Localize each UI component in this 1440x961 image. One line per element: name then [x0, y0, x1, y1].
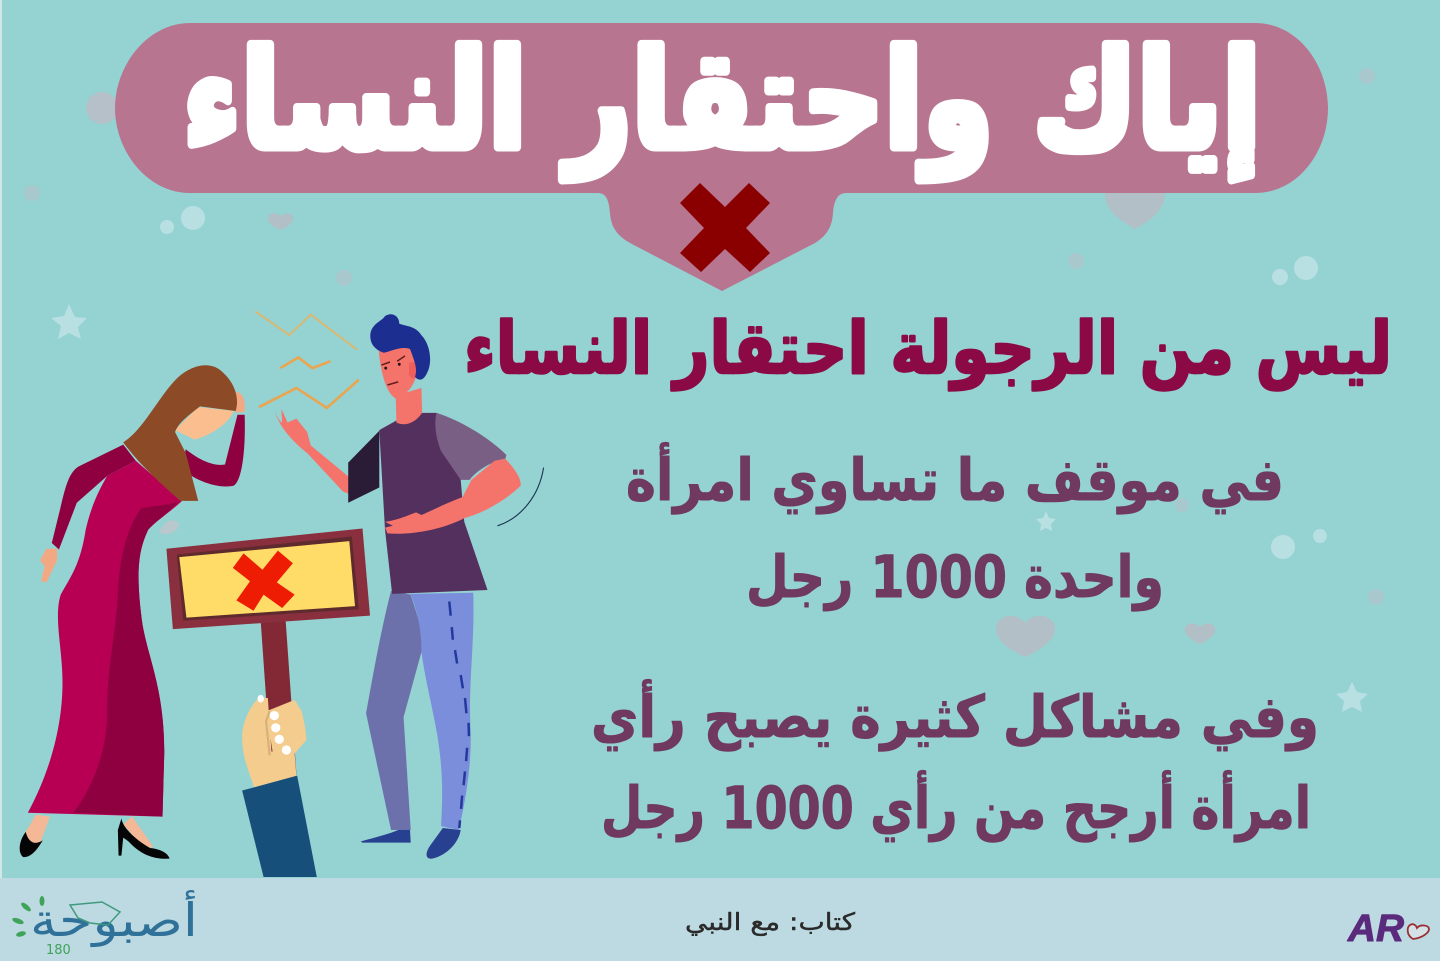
logo: left: 180: [46, 943, 71, 958]
banner: [115, 22, 1328, 291]
logo: left: [12, 890, 198, 958]
icon: anger zigzags: [255, 311, 359, 408]
icon: red x mark: [680, 183, 770, 272]
man: [275, 314, 544, 859]
body text: في موقف ما تساوي امرأة: [626, 442, 1284, 515]
body text: وفي مشاكل كثيرة يصبح رأي: [591, 679, 1319, 752]
body text: امرأة أرجح من رأي 1000 رجل: [601, 770, 1311, 843]
title: إياك واحتقار النساء: [183, 22, 1261, 180]
body text: [591, 442, 1319, 843]
sign: [166, 528, 370, 774]
illustration: woman, man and sign: [20, 311, 544, 877]
logo: AR heart: [1347, 908, 1429, 950]
footer bar: [0, 878, 1440, 961]
logo: left: أصبوحة: [30, 890, 198, 948]
logo: AR heart: AR: [1347, 908, 1405, 950]
source text: كتاب: مع النبي: [685, 908, 856, 936]
body text: واحدة 1000 رجل: [746, 543, 1164, 612]
woman: [20, 365, 245, 859]
hand holding sign: [242, 695, 317, 877]
